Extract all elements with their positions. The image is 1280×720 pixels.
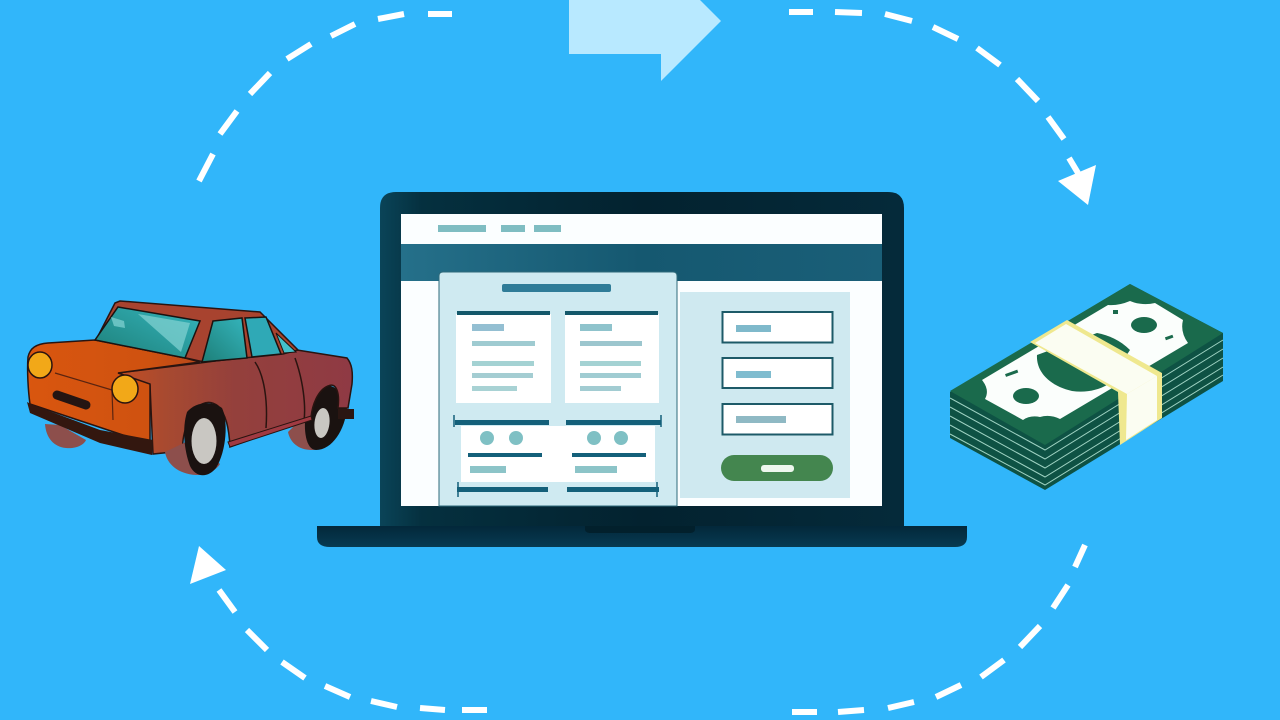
panel: listing bbox=[439, 272, 677, 506]
car body side bbox=[118, 350, 352, 454]
door lines bbox=[255, 358, 305, 428]
note circles bbox=[1005, 310, 1173, 404]
white note bbox=[982, 301, 1188, 420]
rear bumper tip bbox=[338, 409, 354, 419]
side windows bbox=[202, 318, 247, 362]
submit button bbox=[721, 455, 833, 481]
windshield bbox=[95, 307, 200, 358]
panel: form bbox=[680, 292, 850, 498]
arrow: dashed top-left arc bbox=[199, 14, 452, 181]
front bumper bbox=[27, 402, 153, 455]
form field 1 bbox=[722, 312, 832, 342]
roof bbox=[96, 301, 298, 362]
rear wheel bbox=[288, 385, 347, 450]
bill edge lines bbox=[950, 340, 1223, 485]
screen white bbox=[401, 214, 882, 506]
icon: rusty red car bbox=[27, 301, 354, 475]
arrow: top block arrow bbox=[569, 0, 721, 81]
form field 2 bbox=[722, 358, 832, 388]
form field 3 bbox=[722, 404, 832, 434]
laptop bezel bbox=[380, 192, 904, 526]
card: lower listing bbox=[454, 415, 661, 497]
rocker sill bbox=[228, 416, 312, 447]
header band bbox=[401, 244, 882, 281]
card: top right bbox=[565, 311, 659, 403]
listing title bbox=[502, 284, 611, 292]
card: top left bbox=[456, 311, 551, 403]
hood and nose bbox=[28, 340, 200, 444]
hood crease lines bbox=[55, 373, 113, 420]
icon: laptop bbox=[317, 192, 967, 547]
top bill bbox=[950, 284, 1223, 445]
laptop base bbox=[317, 526, 967, 547]
paper band bbox=[1030, 320, 1162, 445]
front wheel bbox=[165, 403, 226, 475]
nav bars bbox=[438, 225, 561, 232]
laptop notch bbox=[585, 526, 695, 533]
arrow: dashed bottom-left arc with head bbox=[190, 546, 487, 710]
stack sides bbox=[950, 284, 1223, 490]
arrow: dashed bottom-right arc bbox=[792, 545, 1085, 712]
headlights bbox=[28, 352, 138, 403]
grille slot bbox=[57, 395, 86, 405]
arrow: dashed top-right arc with head bbox=[789, 12, 1096, 205]
icon: stack of cash bbox=[950, 284, 1223, 490]
front-left wheel bbox=[45, 424, 86, 448]
